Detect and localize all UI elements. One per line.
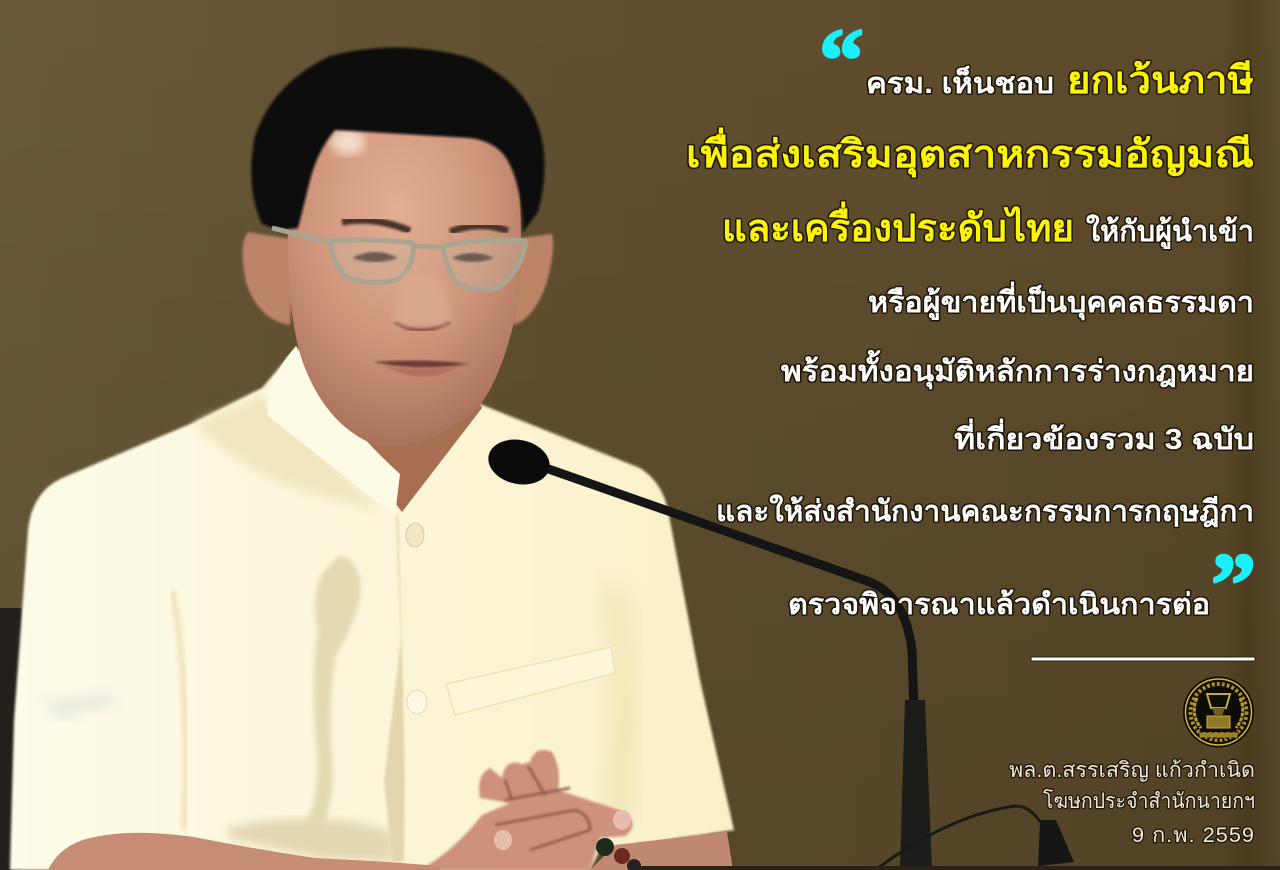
glasses: [272, 228, 526, 289]
microphone: [484, 434, 932, 868]
face: [288, 110, 521, 446]
attribution: [1009, 759, 1255, 847]
desk edge: [640, 866, 1280, 870]
placket: [384, 515, 405, 862]
collar: [267, 346, 400, 516]
name: พล.ต.สรรเสริญ แก้วกำเนิด: [1009, 759, 1255, 782]
position: โฆษกประจำสำนักนายกฯ: [1043, 789, 1255, 813]
icon: government seal: [1183, 676, 1254, 748]
right forearm: [590, 832, 733, 870]
quote text: [686, 60, 1254, 621]
ears: [242, 232, 553, 325]
line 3: [722, 201, 1254, 250]
line 7: และให้ส่งสำนักงานคณะกรรมการกฤษฎีกา: [716, 494, 1254, 528]
eyebrows and eyes: [342, 220, 508, 262]
quote mark: closing: ”: [1211, 536, 1256, 635]
shirt: [10, 348, 734, 870]
divider: [1031, 657, 1255, 661]
line 1: ครม. เห็นชอบ: [866, 65, 1054, 100]
line 1: ยกเว้นภาษี: [1067, 60, 1254, 102]
bracelet: [596, 838, 641, 870]
neck: [325, 385, 482, 512]
pocket: [446, 647, 615, 715]
line 8: ตรวจพิจารณาแล้วดำเนินการต่อ: [788, 589, 1210, 621]
line 2: เพื่อส่งเสริมอุตสาหกรรมอัญมณี: [686, 127, 1254, 178]
line 3: ให้กับผู้นำเข้า: [1086, 214, 1254, 249]
left forearm: [48, 833, 440, 870]
date: 9 ก.พ. 2559: [1132, 824, 1255, 847]
nose and mouth: [373, 275, 470, 376]
line 5: พร้อมทั้งอนุมัติหลักการร่างกฎหมาย: [781, 349, 1254, 389]
portrait: man in cream shirt: [10, 47, 734, 870]
quote mark: opening: “: [819, 11, 864, 110]
line 4: หรือผู้ขายที่เป็นบุคคลธรรมดา: [868, 281, 1254, 320]
hair: [251, 47, 545, 232]
hands: [420, 750, 632, 870]
chair: [0, 608, 22, 870]
second microphone: [878, 806, 1074, 868]
line 6: ที่เกี่ยวข้องรวม 3 ฉบับ: [954, 418, 1254, 456]
shirt folds: [304, 556, 361, 830]
forehead highlight: [331, 129, 365, 155]
sleeve seam shadow: [172, 590, 186, 830]
line 3: และเครื่องประดับไทย: [722, 201, 1074, 250]
line 1: [866, 60, 1254, 102]
buttons: [406, 523, 424, 547]
